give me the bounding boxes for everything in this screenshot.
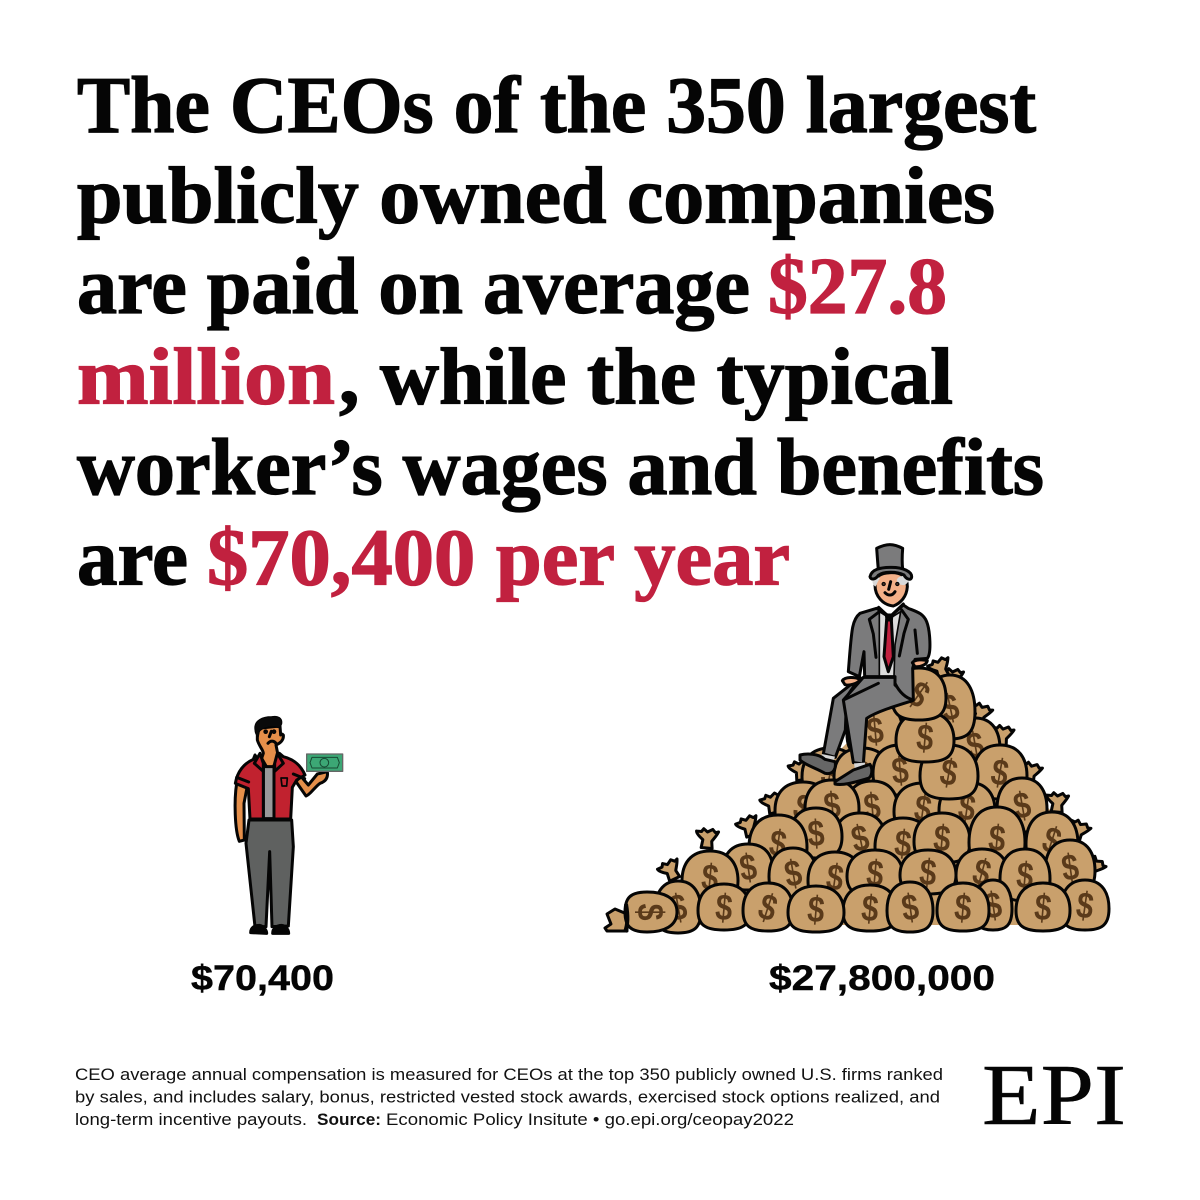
- illustration: pile of money bags: $: [714, 887, 734, 929]
- title: headline: worker’s wages and benefits: [77, 424, 1044, 512]
- illustration: pile of money bags: $: [767, 822, 789, 866]
- illustration: pile of money bags: $: [1074, 884, 1096, 928]
- illustration: pile of money bags: $: [937, 751, 961, 795]
- illustration: pile of money bags: $: [1015, 855, 1035, 897]
- illustration: pile of money bags: $: [968, 851, 995, 895]
- illustration: pile of money bags: $: [862, 786, 882, 828]
- illustration: pile of money bags: [605, 656, 1109, 933]
- illustration: pile of money bags: $: [860, 888, 880, 930]
- illustration: pile of money bags: $: [987, 818, 1007, 860]
- illustration: pile of money bags: $: [824, 856, 846, 900]
- illustration: pile of money bags: $: [1059, 846, 1082, 890]
- illustration: pile of money bags: $: [848, 817, 873, 861]
- illustration: pile of money bags: $: [1033, 887, 1053, 929]
- footnote and source: long-term incentive payouts.: [75, 1110, 307, 1129]
- illustration: pile of money bags: $: [666, 886, 690, 930]
- illustration: pile of money bags: $: [807, 813, 826, 855]
- illustration: pile of money bags: $: [854, 753, 871, 795]
- illustration: pile of money bags: $: [982, 884, 1005, 928]
- illustration: pile of money bags: $: [915, 717, 935, 759]
- illustration: pile of money bags: $: [988, 751, 1012, 795]
- illustration: pile of money bags: $: [953, 887, 973, 929]
- illustration: pile of money bags: $: [788, 786, 817, 830]
- worker pay label: $70,400: [191, 959, 334, 998]
- title: headline: $70,400 per year: [207, 514, 790, 602]
- illustration: pile of money bags: $: [893, 823, 913, 865]
- illustration: pile of money bags: $: [629, 904, 671, 921]
- title: headline: are paid on average: [77, 243, 750, 331]
- illustration: pile of money bags: $: [900, 673, 937, 717]
- illustration: pile of money bags: $: [700, 857, 720, 899]
- illustration: pile of money bags: $: [806, 889, 826, 931]
- illustration: pile of money bags: $: [956, 786, 978, 830]
- title: headline: The CEOs of the 350 largest: [77, 62, 1036, 150]
- illustration: pile of money bags: $: [818, 752, 842, 796]
- title: headline: are: [77, 514, 188, 602]
- CEO pay label: $27,800,000: [769, 959, 995, 998]
- illustration: CEO in top hat sitting on the pile: [800, 545, 930, 785]
- illustration: pile of money bags: $: [899, 886, 922, 930]
- illustration: pile of money bags: $: [890, 750, 910, 792]
- illustration: pile of money bags: $: [865, 710, 885, 752]
- illustration: pile of money bags: $: [753, 886, 782, 930]
- title: headline: , while the typical: [339, 334, 953, 422]
- illustration: pile of money bags: $: [781, 852, 805, 896]
- illustration: pile of money bags: $: [822, 785, 842, 827]
- footnote and source: Economic Policy Insitute • go.epi.org/ceopay2022: [386, 1110, 794, 1129]
- illustration: pile of money bags: $: [865, 853, 885, 895]
- footnote and source: [75, 1065, 943, 1129]
- logo: EPI: EPI: [982, 1046, 1126, 1143]
- pile interior fill: [690, 700, 1100, 925]
- illustration: worker holding a dollar bill: [235, 716, 343, 933]
- illustration: pile of money bags: $: [1037, 819, 1066, 863]
- illustration: pile of money bags: $: [1010, 784, 1034, 828]
- title: headline: publicly owned companies: [77, 152, 995, 240]
- illustration: pile of money bags: $: [912, 787, 934, 831]
- illustration: pile of money bags: $: [932, 818, 952, 860]
- illustration: pile of money bags: $: [963, 724, 987, 768]
- illustration: pile of money bags: $: [938, 686, 963, 730]
- footnote and source: by sales, and includes salary, bonus, restricted vested stock awards, exercised stock options realized, and: [75, 1088, 940, 1106]
- title: headline: $27.8: [768, 243, 947, 331]
- title: headline: million: [77, 334, 335, 422]
- footnote and source: CEO average annual compensation is measured for CEOs at the top 350 publicly owned U.S. firms ranked: [75, 1065, 943, 1084]
- money bag necks: [656, 656, 1107, 884]
- illustration: pile of money bags: $: [737, 846, 760, 890]
- title: headline: [77, 62, 1044, 602]
- footnote and source: Source:: [317, 1110, 381, 1129]
- illustration: pile of money bags: $: [918, 852, 938, 894]
